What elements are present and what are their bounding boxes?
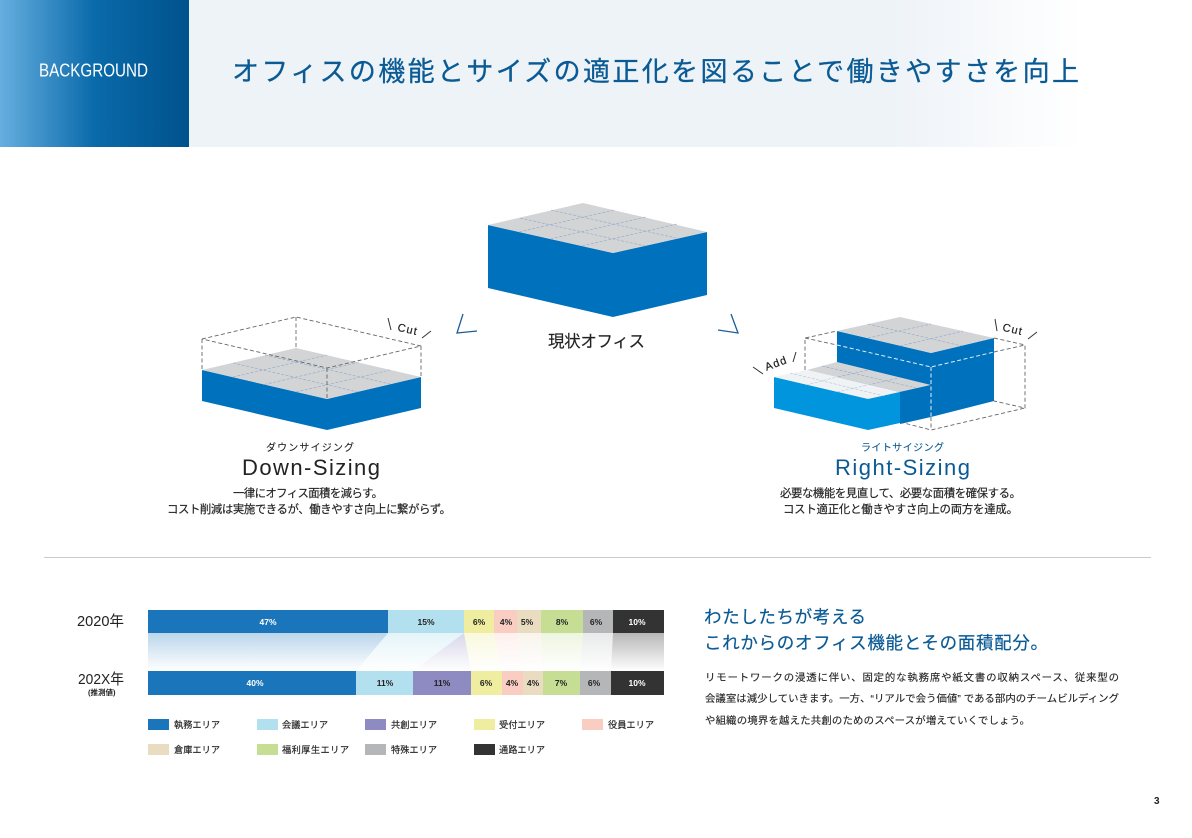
header band bbox=[0, 0, 1192, 147]
year label 2020: 2020年 bbox=[77, 613, 124, 630]
bar 2020 bbox=[148, 610, 664, 633]
legend: 会議エリア bbox=[282, 719, 328, 730]
legend: 受付エリア bbox=[499, 719, 545, 730]
add label: right-sizing: Add bbox=[763, 354, 789, 374]
bar 2020: 6% bbox=[473, 617, 486, 627]
heading: office functions: これからのオフィス機能とその面積配分。 bbox=[704, 633, 1048, 653]
text block: right-sizing: ライトサイジング bbox=[861, 441, 944, 454]
year label 202X: 202X年 bbox=[78, 671, 124, 688]
text block: right-sizing bbox=[780, 441, 1021, 516]
page title: オフィスの機能とサイズの適正化を図ることで働きやすさを向上 bbox=[232, 57, 1079, 87]
bar 202X: 11% bbox=[377, 678, 394, 688]
bar 2020: 6% bbox=[590, 617, 603, 627]
illustration: right-sizing blocks bbox=[774, 317, 1025, 430]
bar 2020: 47% bbox=[259, 617, 277, 627]
arrow: to right-sizing bbox=[718, 314, 738, 333]
heading: office functions: わたしたちが考える bbox=[704, 607, 866, 627]
legend: 共創エリア bbox=[391, 720, 437, 730]
text block: right-sizing: 必要な機能を見直して、必要な面積を確保する。 bbox=[780, 486, 1021, 500]
cut label: right-sizing: Cut bbox=[1001, 322, 1024, 338]
arrow: to down-sizing bbox=[457, 314, 477, 333]
heading: office functions bbox=[704, 607, 1048, 653]
illustration: current office block bbox=[488, 203, 707, 317]
header title background bbox=[189, 0, 1192, 147]
reduced grey floor bbox=[807, 362, 931, 424]
bar 202X: 11% bbox=[434, 678, 451, 688]
cut label: down-sizing bbox=[388, 318, 431, 338]
text block: down-sizing: ダウンサイジング bbox=[266, 441, 354, 454]
bar 202X: 10% bbox=[628, 678, 646, 688]
year label 202X: (推測値) bbox=[88, 687, 116, 697]
cut label: down-sizing: Cut bbox=[396, 322, 419, 338]
text block: down-sizing bbox=[167, 441, 451, 516]
legend: 執務エリア bbox=[174, 719, 220, 730]
bar 202X: 7% bbox=[555, 678, 568, 688]
bar 2020: 4% bbox=[500, 617, 513, 627]
illustration: down-sizing block bbox=[202, 317, 421, 430]
label: current office: 現状オフィス bbox=[548, 332, 645, 351]
added block bbox=[774, 370, 900, 430]
bar 2020: 5% bbox=[521, 617, 534, 627]
bar 202X: 40% bbox=[246, 678, 264, 688]
upper kept block bbox=[837, 317, 994, 417]
legend: 特殊エリア bbox=[391, 744, 437, 755]
text block: down-sizing: コスト削減は実施できるが、働きやすさ向上に繋がらず。 bbox=[167, 502, 451, 516]
cut label: right-sizing bbox=[995, 319, 1037, 339]
text block: right-sizing: コスト適正化と働きやすさ向上の両方を達成。 bbox=[783, 502, 1018, 516]
section tag: BACKGROUND bbox=[0, 0, 189, 147]
page number: 3 bbox=[1154, 796, 1160, 807]
bar 2020: 10% bbox=[628, 617, 646, 627]
bar 2020: 8% bbox=[556, 617, 569, 627]
section tag: BACKGROUND: BACKGROUND bbox=[39, 60, 148, 80]
body text: や組織の境界を越えた共創のためのスペースが増えていくでしょう。 bbox=[705, 714, 1030, 727]
legend: 通路エリア bbox=[499, 744, 545, 755]
legend: 福利厚生エリア bbox=[282, 744, 349, 755]
bar 202X: 6% bbox=[480, 678, 493, 688]
bar 202X: 6% bbox=[588, 678, 601, 688]
body text: 会議室は減少していきます。一方、“リアルで会う価値” である部内のチームビルディング bbox=[705, 692, 1119, 705]
body text bbox=[705, 671, 1119, 727]
transition bands bbox=[148, 633, 664, 671]
text block: right-sizing: Right-Sizing bbox=[835, 455, 970, 480]
legend bbox=[148, 719, 654, 755]
year label 202X bbox=[78, 671, 124, 697]
text block: down-sizing: Down-Sizing bbox=[242, 455, 380, 480]
add label: right-sizing bbox=[753, 352, 796, 374]
legend: 役員エリア bbox=[608, 719, 654, 730]
legend: 倉庫エリア bbox=[174, 744, 220, 755]
bar 202X bbox=[148, 671, 664, 695]
body text: リモートワークの浸透に伴い、固定的な執務席や紙文書の収納スペース、従来型の bbox=[705, 671, 1119, 684]
bar 202X: 4% bbox=[506, 678, 519, 688]
stacked bar comparison chart bbox=[77, 610, 664, 697]
bar 2020: 15% bbox=[417, 617, 435, 627]
bar 202X: 4% bbox=[527, 678, 540, 688]
text block: down-sizing: 一律にオフィス面積を減らす。 bbox=[233, 486, 383, 500]
